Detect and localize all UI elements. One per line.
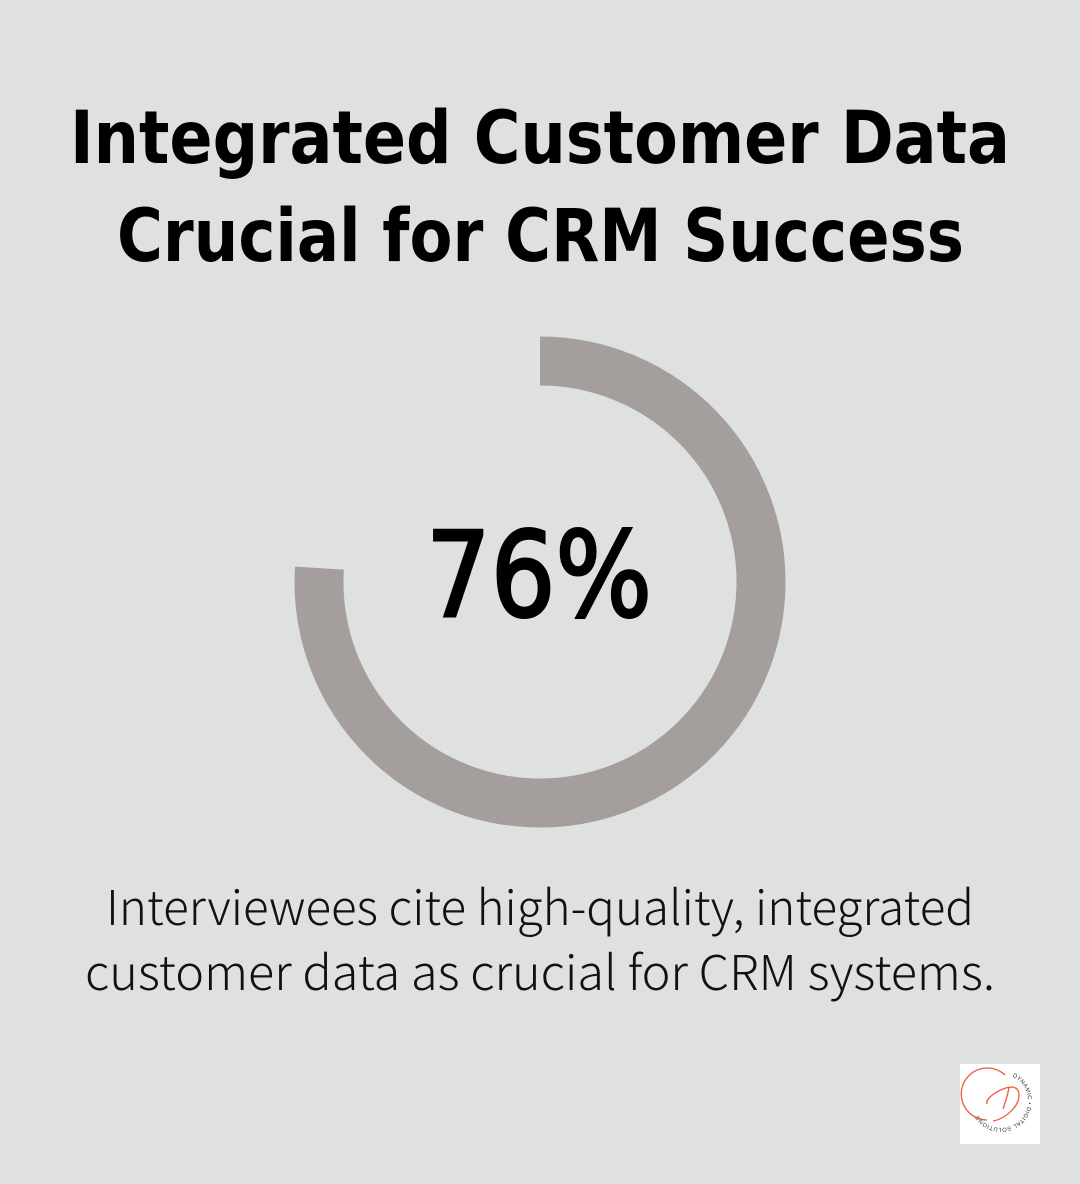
- logo: Dynamic Digital Solutions: [960, 1064, 1040, 1144]
- donut chart: 76%: [319, 361, 761, 803]
- description text: Interviewees cite high-quality, integrated: [106, 869, 974, 939]
- description text: [85, 869, 995, 1004]
- logo: Dynamic Digital Solutions: DYNAMIC • DIGITAL SOLUTIONS: [976, 1073, 1032, 1132]
- title: [70, 96, 1010, 279]
- donut value: 76%: [426, 506, 652, 644]
- description text: customer data as crucial for CRM systems.: [85, 934, 995, 1004]
- title: Crucial for CRM Success: [117, 194, 964, 279]
